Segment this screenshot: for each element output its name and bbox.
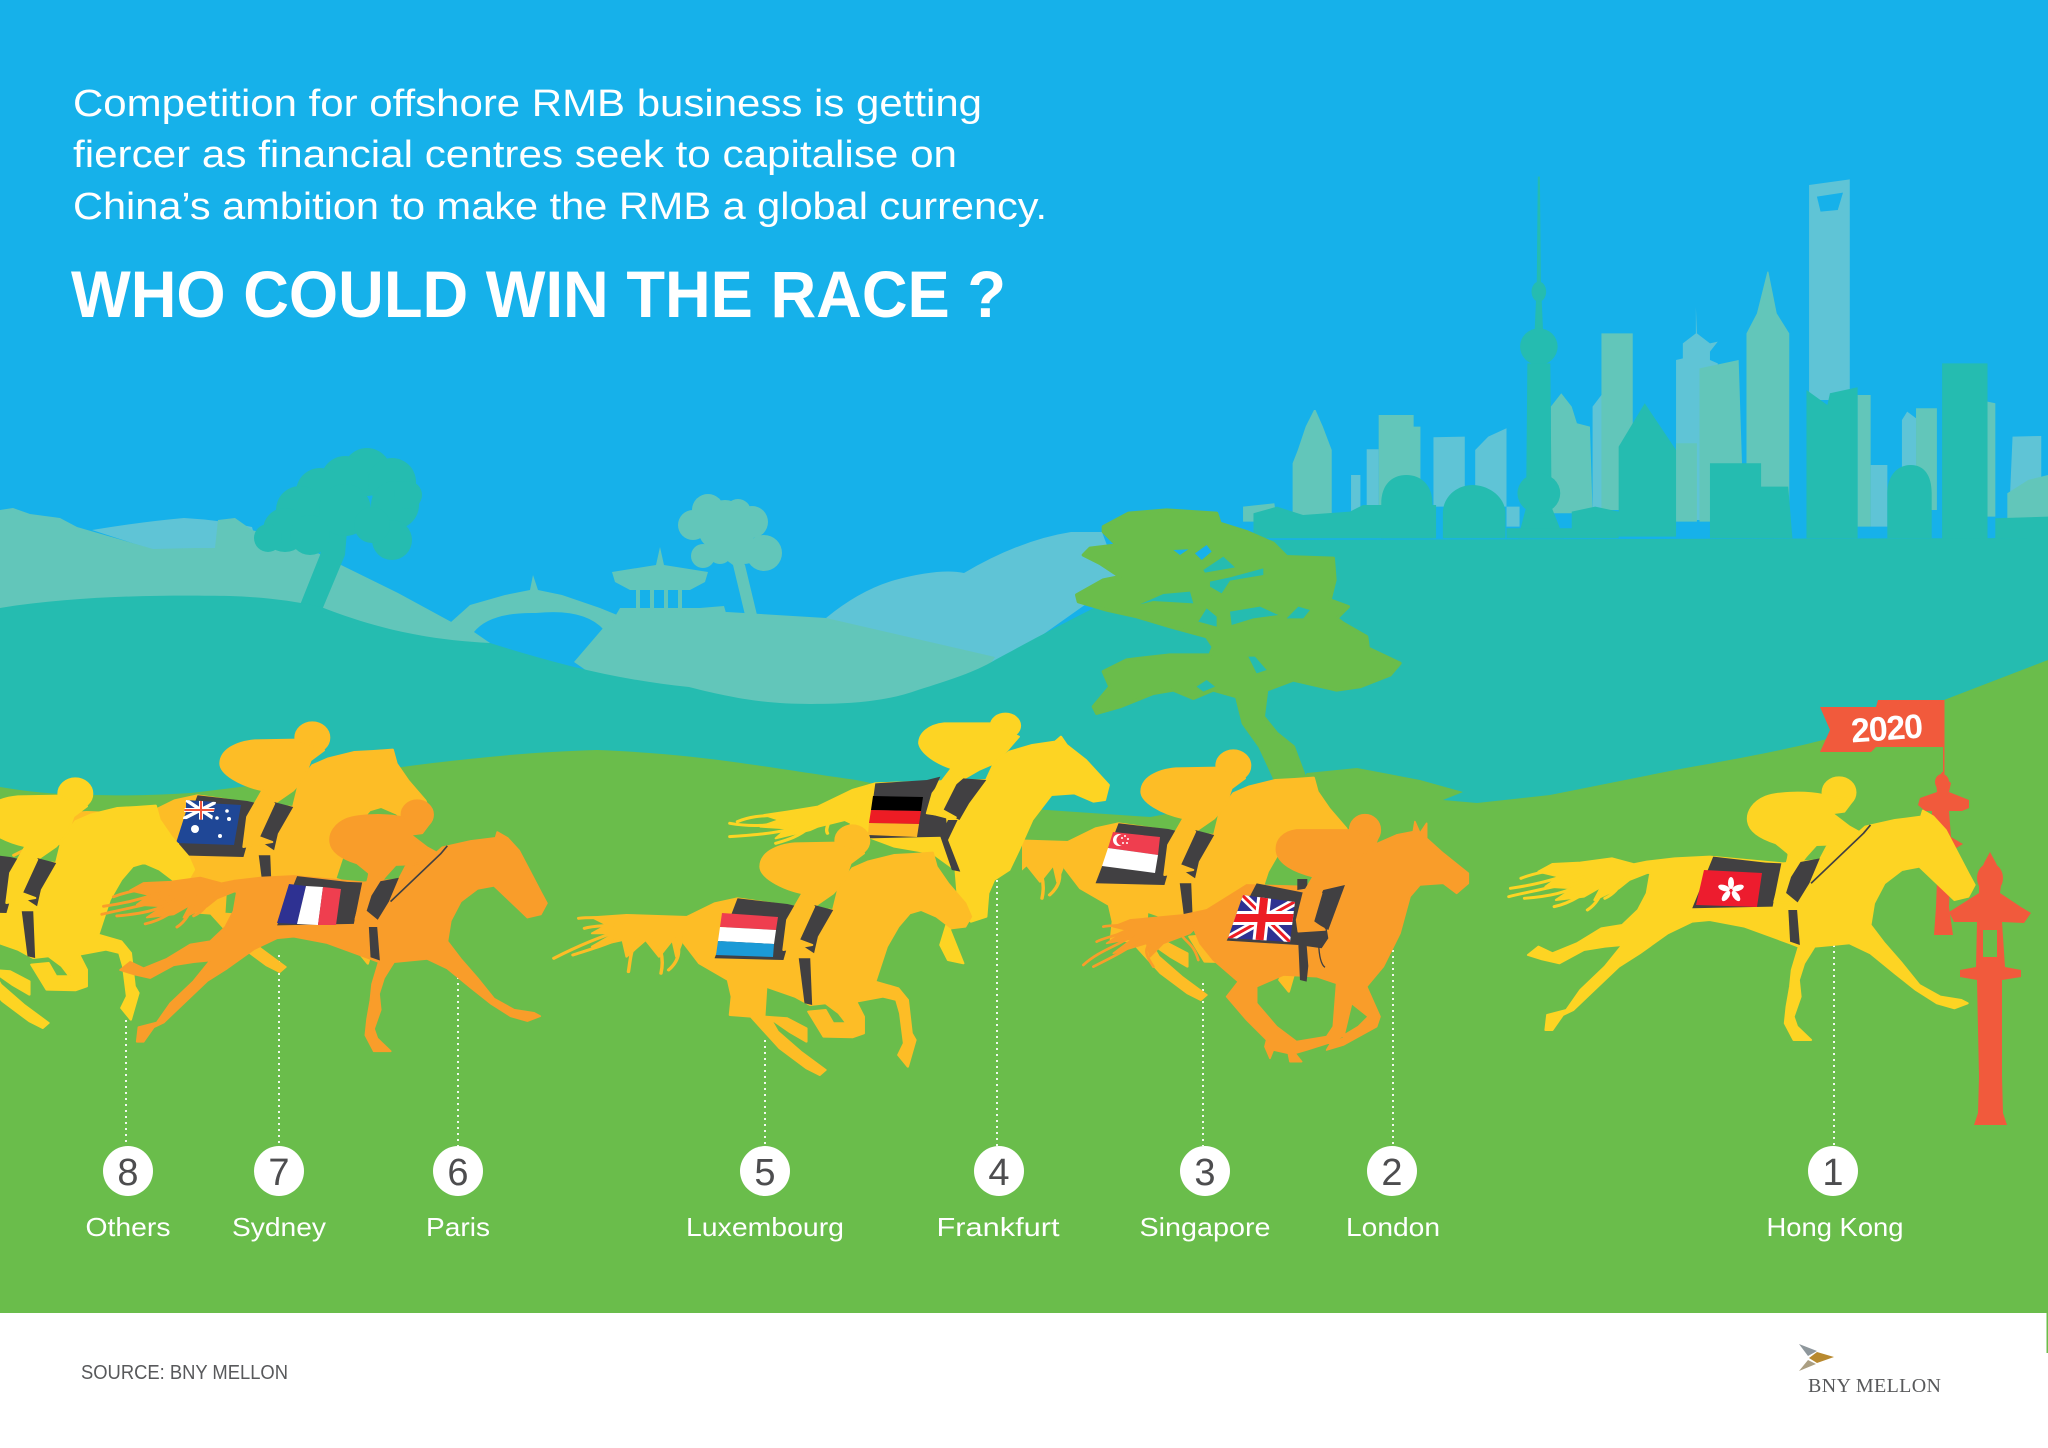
horse 8: others [0,778,194,1028]
horse 6: Paris [102,800,547,1051]
marker: 8 Others: Others [86,1212,170,1242]
pavilion [610,547,728,625]
marker: 5 Luxembourg: 5 [754,1152,776,1194]
intro paragraph: Competition for offshore RMB business is getting [73,83,982,125]
marker: 5 Luxembourg: Luxembourg [686,1212,844,1242]
marker: 6 Paris: 6 [447,1152,469,1194]
horse 1: Hong Kong [1509,777,1975,1040]
flag: Singapore [1102,832,1160,873]
marker: 1 Hong Kong: 1 [1822,1152,1844,1194]
footer band [0,1313,2048,1448]
horse 3: Singapore [1022,749,1348,1001]
marker: 1 Hong Kong: Hong Kong [1766,1212,1904,1242]
flag: France [277,884,341,925]
marker: 4 Frankfurt: Frankfurt [936,1212,1060,1242]
small tree behind pavilion [678,494,782,615]
intro paragraph: fiercer as financial centres seek to capitalise on [73,134,957,176]
large green pine tree [1077,510,1400,790]
flag: Luxembourg [716,913,778,957]
marker: 7 Sydney: 7 [268,1152,290,1194]
flag: United Kingdom [1228,895,1295,942]
hill: distant left [92,518,260,555]
intro paragraph [73,83,1047,228]
horse 4: Frankfurt [730,714,1109,963]
marker: 5 Luxembourg [686,1146,844,1242]
rank markers and labels [86,1146,1904,1242]
marker: 2 London [1346,1146,1440,1242]
intro paragraph: China’s ambition to make the RMB a global currency. [73,186,1047,228]
flag: Germany [868,796,923,837]
marker: 3 Singapore: 3 [1194,1152,1216,1194]
flag: Hong Kong [1696,870,1762,907]
hill: distant right [826,532,1120,665]
horse 5: Luxembourg [554,825,971,1075]
left pine tree [254,448,422,610]
front lantern post [1949,852,2031,1125]
hill: left slope with fort [0,508,490,660]
marker: 8 Others [86,1146,170,1242]
BNY Mellon logo [1799,1344,1941,1397]
rear lantern post [1918,772,1969,935]
marker: 2 London: London [1346,1212,1440,1242]
source note: SOURCE: BNY MELLON [81,1362,288,1384]
horse 7: Sydney [14,722,431,972]
marker: 1 Hong Kong [1766,1146,1904,1242]
marker: 7 Sydney [232,1146,326,1242]
foreground teal hills [0,538,2048,900]
marker: 4 Frankfurt: 4 [988,1152,1010,1194]
marker: 3 Singapore [1140,1146,1270,1242]
marker: 6 Paris [426,1146,490,1242]
marker: 2 London: 2 [1381,1152,1403,1194]
horse 2: London [1083,815,1468,1062]
green race ground [0,660,2048,1313]
BNY Mellon logo: BNY MELLON [1808,1375,1941,1397]
finish flag 2020: 2020 [1850,708,1924,750]
hill: pavilion slope [574,612,995,720]
marker: 4 Frankfurt [936,1146,1060,1242]
marker: 7 Sydney: Sydney [232,1212,326,1242]
marker: 6 Paris: Paris [426,1212,490,1242]
headline: WHO COULD WIN THE RACE ? [71,257,1006,331]
marker: 3 Singapore: Singapore [1140,1212,1270,1242]
city skyline [1243,177,2048,540]
stone bridge [451,575,622,643]
marker: 8 Others: 8 [117,1152,139,1194]
flag: Australia [176,800,241,845]
finish flag 2020 [1820,700,1944,775]
dotted leader lines [126,880,1834,1146]
